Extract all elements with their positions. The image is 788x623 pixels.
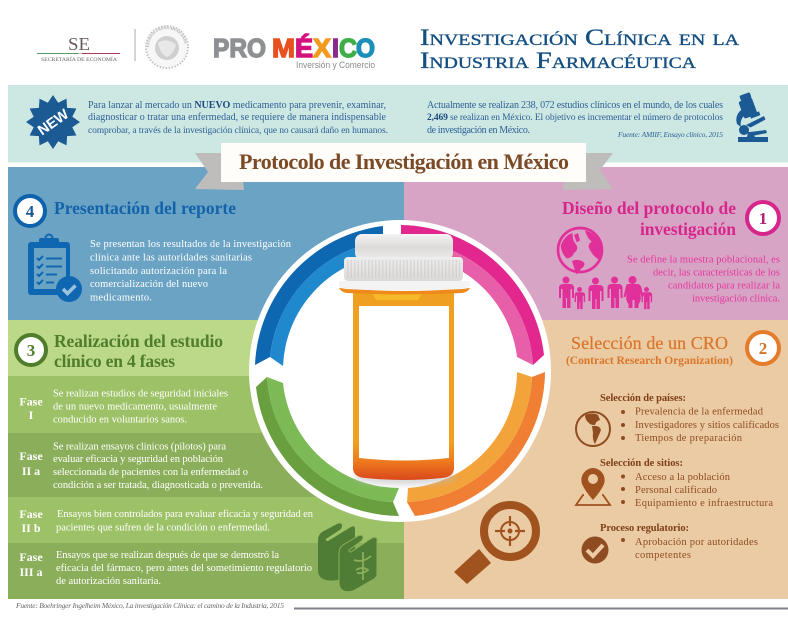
icon: family — [559, 276, 652, 309]
text: intro right: Fuente: AMIIF, Ensayo clínico, 2015 — [617, 130, 723, 139]
row: Fase II a: condición a ser tratada, diagnosticada o prevenida. — [53, 480, 263, 491]
text block: solicitando autorización para la — [90, 266, 227, 277]
text: intro right — [427, 100, 723, 139]
row: Fase III a: Ensayos que se realizan después de que se demostró la — [56, 550, 279, 561]
list: regulatory process — [600, 523, 758, 561]
list: site selection: Acceso a la población — [635, 472, 731, 483]
title: Industria Farmacéutica — [420, 48, 697, 73]
text: intro left: diagnosticar o tratar una enfermedad, se requiere de manera indispensable — [88, 112, 387, 123]
title: Investigación Clínica en la — [420, 25, 740, 50]
logo: national seal — [134, 25, 189, 69]
heading: clínico en 4 fases — [54, 351, 175, 371]
text block: clínica ante las autoridades sanitarias — [90, 252, 252, 264]
row: Fase I — [8, 376, 404, 433]
row: Fase II a: evaluar eficacia y seguridad en población — [53, 454, 224, 465]
icon: magnifier target — [454, 505, 536, 584]
text block: comercialización del nuevo — [90, 279, 208, 290]
icon: microscope — [736, 92, 768, 142]
heading — [562, 198, 736, 239]
logo: ProMéxico: M — [272, 33, 295, 63]
text block — [627, 254, 780, 304]
logo: ProMéxico: O — [356, 33, 375, 63]
logo: Secretaría de Economía: SECRETARÍA DE ECONOMÍA — [41, 55, 117, 63]
banner title: Protocolo de Investigación en México — [239, 149, 569, 174]
row: Fase II b: pacientes que sufren de la condición o enfermedad. — [56, 522, 270, 534]
text: intro right: de investigación en México. — [427, 125, 530, 136]
step number 1: 1 — [759, 209, 767, 228]
text block: investigación clínica. — [692, 294, 780, 304]
row: Fase I: conducido en voluntarios sanos. — [53, 414, 187, 426]
list: regulatory process: Proceso regulatorio: — [600, 523, 689, 534]
list: country selection: Prevalencia de la enfermedad — [635, 406, 764, 418]
row: Fase II b: II b — [21, 521, 41, 535]
list: site selection: Selección de sitios: — [600, 458, 683, 469]
icon: books — [318, 523, 377, 592]
list: country selection: Investigadores y sitios calificados — [635, 420, 779, 431]
logo: Secretaría de Economía — [37, 34, 120, 63]
text block: decir, las características de los — [653, 268, 780, 278]
text block — [90, 239, 292, 304]
row: Fase II b: Ensayos bien controlados para evaluar eficacia y seguridad en — [57, 509, 314, 520]
logo: ProMéxico: PRO — [213, 33, 266, 63]
logo: ProMéxico: X — [313, 33, 332, 63]
step number 3: 3 — [27, 341, 35, 360]
row: Fase II a: II a — [22, 464, 40, 478]
text: intro right: 2,469 se realizan en México. El objetivo es incrementar el número de protocolos — [427, 113, 723, 123]
row: Fase II a: seleccionada de pacientes con la enfermedad o — [53, 467, 248, 478]
list: country selection: Selección de países: — [600, 393, 686, 404]
text: intro right: Actualmente se realizan 238, 072 estudios clínicos en el mundo, de los cuales — [427, 100, 723, 111]
source note: Fuente: Boehringer Ingelheim México, La investigación Clínica: el camino de la Industria, 2015 — [15, 601, 284, 610]
panel: step 2 CRO selection — [404, 320, 788, 599]
row: Fase III a — [8, 543, 404, 599]
banner title — [195, 143, 613, 190]
logo: Secretaría de Economía: SE — [68, 34, 90, 54]
row: Fase II b: Fase — [19, 507, 43, 521]
text block: Se define la muestra poblacional, es — [627, 254, 780, 266]
icon: check mark — [582, 536, 608, 564]
arrow: orange segment — [407, 372, 545, 516]
list: country selection: Tiempos de preparación — [635, 433, 743, 444]
heading: Selección de un CRO — [571, 333, 728, 353]
panel: step 1 protocol design — [404, 167, 788, 320]
step number 1 — [747, 202, 779, 234]
text: intro left — [88, 100, 388, 136]
row: Fase I: Se realizan estudios de seguridad iniciales — [53, 388, 228, 400]
list: site selection: Equipamiento e infraestructura — [635, 498, 773, 509]
icon: NEW badge — [26, 95, 80, 149]
panel: intro band — [8, 85, 788, 162]
row: Fase I: de un nuevo medicamento, usualmente — [53, 402, 217, 412]
row: Fase III a: Fase — [19, 550, 43, 564]
heading: Diseño del protocolo de — [562, 198, 736, 218]
heading: investigación — [640, 219, 736, 239]
logo: national seal: ESTADOS UNIDOS MEXICANOS — [146, 26, 187, 47]
logo: ProMéxico: C — [339, 33, 357, 63]
row: Fase II a: Se realizan ensayos clínicos (pilotos) para — [53, 442, 226, 452]
step number 2 — [747, 332, 779, 364]
row: Fase III a: eficacia del fármaco, pero antes del sometimiento regulatorio — [56, 563, 312, 574]
panel: step 3 clinical study — [8, 320, 404, 599]
logo: ProMéxico — [213, 33, 375, 70]
list: regulatory process: competentes — [635, 550, 691, 561]
row: Fase II b — [8, 497, 404, 543]
arrow: green segment — [256, 377, 399, 516]
step number 4 — [15, 196, 45, 226]
row: Fase III a: III a — [19, 565, 43, 579]
step number 3 — [16, 335, 46, 365]
heading — [566, 333, 733, 367]
text: intro left: comprobar, a través de la investigación clínica, que no causará daño en humanos. — [88, 126, 388, 136]
icon: globe — [558, 228, 602, 274]
logo: ProMéxico: É — [295, 33, 313, 63]
row: Fase III a: de autorización sanitaria. — [56, 576, 161, 587]
text block: candidatos para realizar la — [668, 280, 780, 292]
logo: ProMéxico: I — [332, 33, 339, 63]
panel: step 4 report — [8, 167, 404, 320]
heading — [54, 331, 223, 371]
list: regulatory process: Aprobación por autoridades — [635, 537, 758, 548]
row: Fase II a — [8, 433, 404, 497]
heading: Presentación del reporte — [54, 198, 236, 218]
text block: Se presentan los resultados de la investigación — [90, 239, 292, 250]
heading: (Contract Research Organization) — [566, 355, 733, 367]
list: site selection — [600, 458, 773, 509]
text block: medicamento. — [90, 292, 152, 304]
logo: ProMéxico: Inversión y Comercio — [296, 60, 375, 70]
icon: NEW badge: NEW — [35, 106, 72, 139]
row: Fase I: I — [29, 408, 34, 422]
icon: world — [576, 412, 610, 446]
list: country selection — [600, 393, 779, 444]
central cycle diagram — [249, 220, 551, 522]
arrow: blue segment — [255, 226, 383, 366]
text: intro left: Para lanzar al mercado un NUEVO medicamento para prevenir, examinar, — [88, 100, 386, 111]
step number 4: 4 — [26, 202, 35, 221]
row: Fase I: Fase — [19, 394, 43, 408]
title — [420, 25, 740, 73]
arrow: pink segment — [401, 225, 544, 365]
icon: location pin — [576, 468, 610, 505]
icon: clipboard — [28, 234, 82, 302]
pill bottle — [339, 234, 470, 485]
list: site selection: Personal calificado — [635, 485, 717, 496]
row: Fase II a: Fase — [19, 449, 43, 463]
heading: Realización del estudio — [54, 331, 223, 351]
step number 2: 2 — [759, 339, 767, 358]
